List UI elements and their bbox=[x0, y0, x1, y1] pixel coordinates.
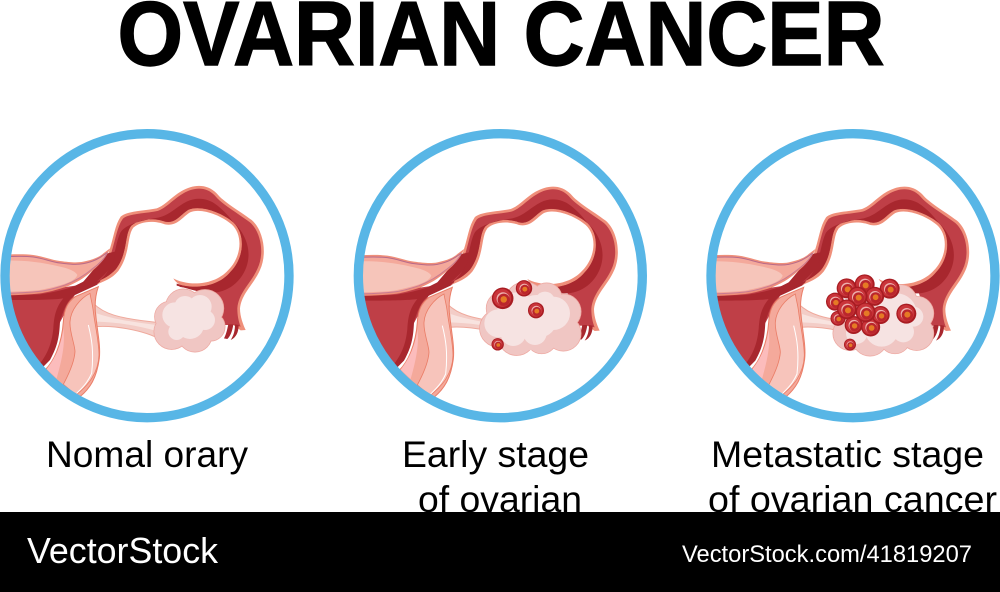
label: early stage: of ovarian bbox=[418, 479, 582, 520]
tumours: early stage bbox=[491, 280, 544, 351]
anatomy: uterus and fallopian tube bbox=[0, 186, 264, 397]
footer image id: VectorStock.com/41819207 bbox=[682, 541, 972, 568]
footer bar bbox=[0, 512, 1000, 592]
label: normal ovary: Nomal orary bbox=[46, 434, 248, 475]
ring: blue circle bbox=[711, 134, 995, 418]
label: metastatic stage: of ovarian cancer bbox=[708, 479, 997, 520]
panel: metastatic stage bbox=[702, 134, 995, 418]
label: early stage: Early stage bbox=[402, 434, 589, 475]
anatomy: uterus and fallopian tube bbox=[351, 187, 618, 397]
ovary: normal bbox=[154, 289, 225, 352]
label: early stage bbox=[402, 434, 589, 520]
panel: early stage bbox=[351, 134, 642, 418]
label: metastatic stage: Metastatic stage bbox=[711, 434, 984, 475]
tumours: metastatic cluster bbox=[826, 274, 916, 351]
ovary: metastatic stage bbox=[833, 285, 933, 356]
anatomy: uterus and fallopian tube bbox=[702, 187, 969, 397]
label: metastatic stage bbox=[708, 434, 997, 520]
footer logo: VectorStock bbox=[27, 530, 219, 571]
ovary: early stage bbox=[480, 282, 581, 355]
panel: normal ovary bbox=[0, 134, 289, 418]
ring: blue circle bbox=[358, 134, 642, 418]
ring: blue circle bbox=[5, 134, 289, 418]
